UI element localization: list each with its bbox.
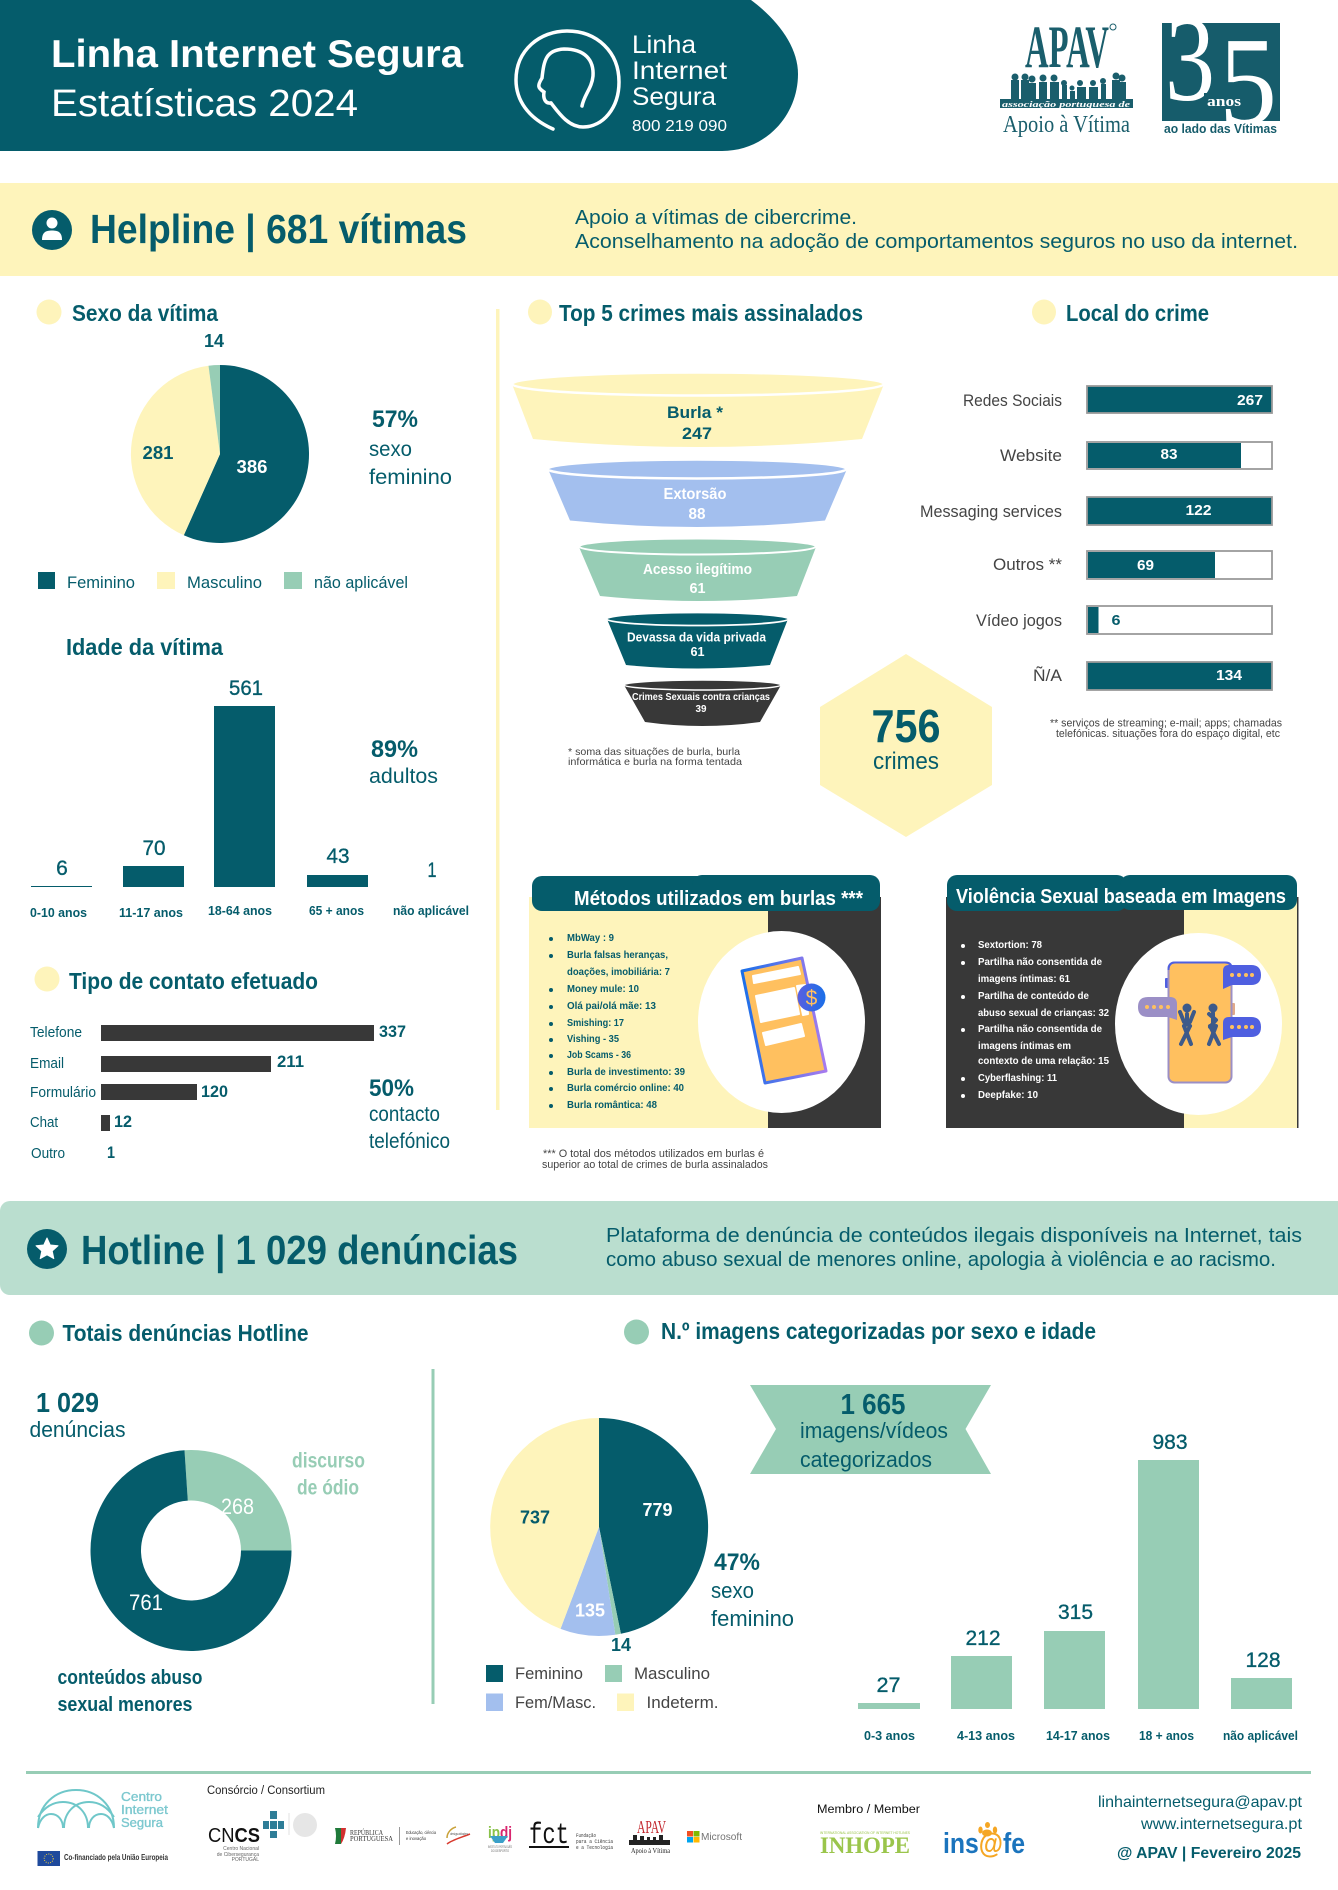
panel header: Métodos utilizados em burlas *** — [574, 887, 863, 910]
heading: Tipo de contato efetuado — [69, 968, 318, 994]
list: métodos: Job Scams - 36 — [567, 1049, 631, 1061]
funnel: extorsão: Extorsão — [664, 486, 726, 503]
funnel: devassa da vida privada: 61 — [690, 644, 704, 659]
heading: Local do crime — [1066, 300, 1209, 326]
bar: vídeo jogos: Vídeo jogos — [976, 611, 1062, 630]
pie chart: 779 — [642, 1500, 672, 1520]
illustration: phone with coin: $ — [806, 987, 818, 1010]
callout 89%: 89% — [371, 736, 418, 763]
hotline description — [606, 1224, 1302, 1271]
logo: Centro Internet Segura — [38, 1789, 168, 1830]
funnel: acesso ilegítimo: 61 — [690, 580, 706, 597]
panel: idade da vítima — [30, 634, 469, 920]
list: métodos: Burla romântica: 48 — [567, 1099, 657, 1111]
logo: 35 anos: 5 — [1219, 13, 1277, 152]
helpline band — [0, 183, 1338, 276]
hotline description: como abuso sexual de menores online, apologia à violência e ao racismo. — [606, 1248, 1276, 1271]
heading: Totais denúncias Hotline — [62, 1320, 308, 1346]
donut chart — [90, 1450, 292, 1651]
bar chart: idade: 14-17 anos — [1046, 1728, 1110, 1743]
hotline description: Plataforma de denúncia de conteúdos ilegais disponíveis na Internet, tais — [606, 1224, 1302, 1247]
list: métodos: Smishing: 17 — [567, 1017, 624, 1029]
pie chart: 386 — [236, 457, 268, 477]
bar: vídeo jogos — [976, 606, 1272, 634]
panel: violência sexual baseada em imagens — [946, 875, 1298, 1128]
legend: Masculino — [187, 574, 262, 592]
logo: 35 anos: ao lado das Vítimas — [1164, 122, 1277, 136]
logo: IPDJ — [488, 1823, 512, 1853]
legend: Indeterm. — [646, 1693, 718, 1712]
logo: CNCS — [208, 1811, 317, 1863]
list: violência: Cyberflashing: 11 — [978, 1072, 1057, 1084]
logo: Microsoft: Microsoft — [701, 1831, 742, 1843]
list: violência: abuso sexual de crianças: 32 — [978, 1007, 1109, 1019]
logo: FCT: fct — [529, 1819, 569, 1853]
funnel: crimes sexuais: 39 — [696, 703, 707, 715]
footnote: soma: informática e burla na forma tentada — [568, 756, 742, 768]
helpline description — [575, 206, 1298, 253]
bar: vídeo jogos: 6 — [1112, 612, 1120, 629]
label: conteúdos abuso sexual menores: conteúdos abuso — [58, 1666, 202, 1689]
bar: n/a — [1033, 662, 1272, 690]
helpline description: Aconselhamento na adoção de comportamentos seguros no uso da internet. — [575, 230, 1298, 253]
logo: insafe: ins@fe — [943, 1828, 1025, 1860]
bar: redes sociais: 267 — [1237, 392, 1263, 409]
legend: Fem/Masc. — [515, 1693, 596, 1712]
heading dot — [528, 300, 552, 324]
callout 50% — [369, 1075, 450, 1153]
bar chart: idade: 4-13 anos — [957, 1728, 1015, 1743]
logo: APAV: APAV — [1025, 14, 1109, 80]
bar: messaging services — [920, 497, 1272, 525]
horizontal bar chart: Chat — [30, 1114, 59, 1131]
bar: n/a: 134 — [1216, 667, 1243, 684]
callout 47%: sexo — [711, 1578, 754, 1603]
logo text: Linha Internet Segura: 800 219 090 — [632, 118, 727, 135]
heading dot — [34, 966, 60, 992]
pie chart: 14 — [204, 331, 224, 351]
callout 89%: adultos — [369, 765, 438, 788]
panel: local do crime — [920, 300, 1282, 740]
heading dot — [29, 1320, 54, 1346]
bar chart: 18-64 anos — [208, 903, 272, 918]
callout 57%: sexo — [369, 438, 412, 461]
bar chart: 11-17 anos — [119, 905, 183, 920]
bar chart — [30, 677, 469, 920]
donut chart: 761 — [129, 1590, 163, 1615]
logo: Centro Internet Segura: Centro — [121, 1789, 162, 1804]
logo: República Portuguesa: PORTUGUESA — [350, 1834, 394, 1843]
callout 57%: 57% — [372, 406, 418, 433]
logo: FCT: Fundação — [576, 1833, 596, 1839]
bar chart: idade: 128 — [1246, 1648, 1281, 1672]
funnel: acesso ilegítimo — [579, 538, 816, 601]
bar: outros: 69 — [1137, 557, 1154, 574]
heading: N.º imagens categorizadas por sexo e idade — [661, 1318, 1096, 1344]
panel header: Violência Sexual baseada em Imagens — [956, 885, 1286, 908]
logo text: Linha Internet Segura: Linha — [632, 31, 696, 59]
icon: head in circle logo — [516, 31, 619, 129]
heading: Sexo da vítima — [72, 300, 218, 326]
footnote: soma — [568, 746, 742, 768]
callout 50%: contacto — [369, 1103, 440, 1126]
list: métodos: Burla comércio online: 40 — [567, 1082, 684, 1094]
callout 50%: 50% — [369, 1075, 414, 1102]
icon: person — [32, 210, 72, 250]
banner: 1 665 imagens: 1 665 — [840, 1389, 906, 1421]
list: violência: imagens íntimas em — [978, 1040, 1071, 1052]
footer — [26, 1771, 1311, 1866]
banner: 1 665 imagens: imagens/vídeos — [800, 1418, 948, 1443]
footnote: serviços: ** serviços de streaming; e-mail; apps; chamadas — [1050, 718, 1282, 730]
horizontal bar chart: 211 — [277, 1053, 304, 1071]
funnel chart — [512, 372, 884, 726]
legend: Feminino — [515, 1664, 583, 1683]
footnote: métodos: superior ao total de crimes de burla assinalados — [542, 1159, 768, 1171]
list: violência: Deepfake: 10 — [978, 1089, 1038, 1101]
label: discurso de ódio: de ódio — [297, 1476, 359, 1500]
logo: IPDJ: ip — [488, 1823, 500, 1842]
illustration: phone with figures and chat bubbles — [1115, 933, 1282, 1115]
horizontal bar chart — [30, 1023, 406, 1162]
bar: outros — [993, 551, 1272, 579]
legend: Masculino — [634, 1664, 710, 1683]
funnel: crimes sexuais: Crimes Sexuais contra crianças — [632, 691, 770, 703]
contacts: linhainternetsegura@apav.pt — [1098, 1794, 1303, 1811]
funnel: crimes sexuais — [624, 680, 781, 726]
label: consórcio: Consórcio / Consortium — [207, 1785, 325, 1797]
logo: FCT — [529, 1819, 613, 1853]
horizontal bar chart: 120 — [201, 1083, 228, 1101]
footnote: serviços — [1050, 718, 1282, 740]
panel: métodos utilizados em burlas — [529, 875, 881, 1128]
logo: IPDJ: INSTITUTO PORTUGUÊS — [488, 1844, 512, 1849]
bar chart: 6 — [56, 857, 68, 880]
helpline description: Apoio a vítimas de cibercrime. — [575, 206, 857, 229]
funnel: burla: Burla * — [667, 403, 723, 422]
horizontal bar chart: Formulário — [30, 1084, 96, 1101]
hotline band — [0, 1201, 1338, 1295]
logo: FCT: para a Ciência — [576, 1839, 613, 1845]
heading dot — [1032, 300, 1056, 324]
funnel: extorsão: 88 — [688, 506, 706, 523]
funnel: acesso ilegítimo: Acesso ilegítimo — [643, 561, 752, 578]
footnote: métodos — [542, 1148, 768, 1171]
bar: redes sociais — [963, 386, 1272, 413]
bar chart: 65 + anos — [309, 903, 364, 918]
logo: EU co-funding — [38, 1851, 168, 1866]
contacts — [1098, 1794, 1303, 1862]
hexagon: 756 crimes — [820, 654, 992, 837]
list: violência: contexto de uma relação: 15 — [978, 1055, 1109, 1067]
logo: APAV small: APAV — [637, 1817, 666, 1837]
callout 47%: feminino — [711, 1606, 794, 1631]
pie chart: 737 — [520, 1508, 550, 1528]
logo text: Linha Internet Segura: Segura — [632, 83, 716, 111]
bar chart: 70 — [142, 837, 166, 860]
legend — [38, 572, 408, 592]
panel: tipo de contato — [30, 966, 450, 1162]
pie chart — [131, 331, 309, 543]
logo: República Portuguesa: desigualdades — [450, 1831, 468, 1836]
label: discurso de ódio — [292, 1450, 365, 1500]
callout 89% — [369, 736, 438, 788]
callout 57% — [369, 406, 452, 489]
hexagon: 756 crimes: crimes — [873, 748, 939, 775]
logo: 35 anos: anos — [1207, 94, 1241, 110]
funnel: burla — [512, 372, 884, 447]
list: violência: Partilha não consentida de — [978, 1023, 1102, 1035]
list: métodos — [549, 932, 685, 1111]
bar: website: 83 — [1160, 446, 1178, 463]
logo: 35 anos — [1162, 23, 1280, 133]
list: métodos: Money mule: 10 — [567, 983, 639, 995]
list: métodos: MbWay : 9 — [567, 932, 614, 944]
logo: CNCS: Centro Nacional — [223, 1846, 259, 1852]
bar chart: idade: 18 + anos — [1139, 1728, 1194, 1743]
horizontal bar chart: Telefone — [30, 1024, 82, 1041]
bar: redes sociais: Redes Sociais — [963, 391, 1062, 410]
legend: não aplicável — [314, 574, 408, 592]
pie chart: 281 — [142, 443, 174, 463]
logo: Centro Internet Segura: Internet — [121, 1802, 168, 1817]
funnel: devassa da vida privada — [606, 612, 788, 668]
bar: website: Website — [1000, 446, 1062, 465]
logo: CNCS: PORTUGAL — [232, 1857, 259, 1863]
callout 50%: telefónico — [369, 1130, 450, 1153]
logo: EU co-funding: Co-financiado pela União Europeia — [64, 1853, 168, 1862]
donut chart: 268 — [221, 1494, 254, 1519]
pie chart — [490, 1418, 708, 1655]
label: discurso de ódio: discurso — [292, 1450, 365, 1472]
logo text: Linha Internet Segura — [632, 31, 727, 135]
list: métodos: Olá pai/olá mãe: 13 — [567, 1000, 656, 1012]
callout 47% — [711, 1549, 794, 1631]
panel header — [532, 875, 880, 911]
list: métodos: doações, imobiliária: 7 — [567, 966, 670, 978]
logo: República Portuguesa: Educação, ciência — [406, 1830, 436, 1835]
list: métodos: Burla falsas heranças, — [567, 949, 668, 961]
logo: República Portuguesa — [335, 1827, 470, 1845]
heading: Idade da vítima — [66, 634, 223, 660]
logo: CNCS: de Cibersegurança — [217, 1852, 259, 1858]
contacts: www.internetsegura.pt — [1140, 1816, 1303, 1833]
logo: INHOPE: INHOPE — [820, 1833, 910, 1858]
logo: República Portuguesa: e inovação — [406, 1836, 426, 1841]
list: métodos: Burla de investimento: 39 — [567, 1066, 685, 1078]
footnote: soma: * soma das situações de burla, burla — [568, 746, 740, 758]
logo: República Portuguesa: REPÚBLICA — [350, 1827, 383, 1837]
total callout: denúncias — [30, 1417, 126, 1442]
bar chart: 43 — [326, 845, 350, 868]
title: Linha Internet Segura — [51, 33, 463, 76]
panel: totais denúncias hotline — [29, 1320, 365, 1716]
bar: outros: Outros ** — [993, 555, 1062, 574]
list: violência: Partilha de conteúdo de — [978, 990, 1089, 1002]
label: conteúdos abuso sexual menores: sexual menores — [58, 1693, 192, 1716]
hexagon: 756 crimes: 756 — [872, 700, 940, 752]
bar chart: idade: 212 — [966, 1626, 1000, 1650]
logo text: Linha Internet Segura: Internet — [632, 57, 727, 85]
horizontal bar chart: 337 — [379, 1023, 406, 1041]
heading: Top 5 crimes mais assinalados — [559, 300, 863, 326]
total callout — [30, 1387, 126, 1442]
list: métodos: Vishing - 35 — [567, 1033, 619, 1045]
funnel: extorsão — [548, 460, 847, 527]
logo: FCT: e a Tecnologia — [576, 1845, 613, 1851]
list: violência — [961, 939, 1109, 1101]
bar chart: não aplicável — [393, 903, 469, 918]
banner: 1 665 imagens — [750, 1385, 991, 1474]
heading dot — [36, 300, 62, 324]
footnote: serviços: telefónicas. situações fora do espaço digital, etc — [1056, 728, 1280, 740]
horizontal bar chart: 1 — [107, 1144, 115, 1162]
bar chart: idade: 27 — [876, 1673, 900, 1697]
total callout: 1 029 — [36, 1387, 99, 1418]
heading dot — [624, 1320, 649, 1344]
bar chart: idade: 983 — [1152, 1430, 1188, 1454]
icon: star — [27, 1229, 67, 1269]
header banner — [0, 0, 798, 151]
logo: INHOPE: INTERNATIONAL ASSOCIATION OF INTERNET HOTLINES — [820, 1830, 910, 1835]
bar chart: 1 — [428, 859, 436, 882]
footnote: métodos: *** O total dos métodos utilizados em burlas é — [543, 1148, 764, 1160]
legend — [486, 1664, 718, 1712]
banner: 1 665 imagens: categorizados — [800, 1447, 932, 1472]
horizontal bar chart: Outro — [31, 1145, 65, 1162]
logo: APAV small: Apoio à Vítima — [631, 1847, 671, 1855]
horizontal bar chart: 12 — [114, 1113, 132, 1131]
panel header — [947, 875, 1297, 911]
subtitle: Estatísticas 2024 — [51, 83, 358, 125]
bar chart: 561 — [229, 677, 263, 700]
bar: n/a: Ñ/A — [1033, 666, 1063, 685]
funnel: devassa da vida privada: Devassa da vida privada — [627, 630, 767, 644]
label: membro: Membro / Member — [817, 1804, 920, 1816]
bar: website — [1000, 442, 1272, 469]
bar chart: idade: 0-3 anos — [864, 1728, 915, 1743]
label: conteúdos abuso sexual menores — [58, 1666, 202, 1716]
hotline heading: Hotline | 1 029 denúncias — [81, 1227, 518, 1273]
panel: imagens categorizadas — [486, 1318, 1298, 1743]
callout 57%: feminino — [369, 466, 452, 489]
list: violência: imagens íntimas: 61 — [978, 973, 1070, 985]
legend: Feminino — [67, 574, 135, 592]
pie chart: 14 — [611, 1635, 631, 1655]
logo: APAV: associação portuguesa de — [1002, 100, 1131, 109]
logo: APAV small — [629, 1817, 671, 1855]
illustration: phone with coin — [698, 931, 865, 1113]
bar chart: idade — [858, 1430, 1298, 1743]
logo: Centro Internet Segura: Segura — [121, 1815, 164, 1830]
bar: messaging services: 122 — [1186, 502, 1212, 519]
panel: sexo da vítima — [36, 300, 452, 592]
bar chart: idade: não aplicável — [1223, 1728, 1298, 1743]
contacts: @ APAV | Fevereiro 2025 — [1117, 1845, 1301, 1862]
logo: IPDJ: DO DESPORTO — [491, 1849, 509, 1853]
horizontal bar chart: Email — [30, 1055, 64, 1072]
pie chart: 135 — [575, 1600, 605, 1620]
logo: CNCS: CNCS — [208, 1825, 260, 1847]
logo: APAV: Apoio à Vítima — [1003, 112, 1130, 138]
bar: messaging services: Messaging services — [920, 502, 1062, 521]
list: violência: Sextortion: 78 — [978, 939, 1042, 951]
funnel: burla: 247 — [682, 424, 712, 443]
helpline heading: Helpline | 681 vítimas — [90, 206, 467, 252]
logo: IPDJ: dj — [500, 1823, 512, 1842]
list: violência: Partilha não consentida de — [978, 956, 1102, 968]
callout 47%: 47% — [714, 1549, 760, 1576]
panel: top 5 crimes — [512, 300, 992, 837]
bar chart: 0-10 anos — [30, 905, 87, 920]
bar chart: idade: 315 — [1058, 1600, 1093, 1624]
logo: APAV — [1000, 14, 1133, 138]
